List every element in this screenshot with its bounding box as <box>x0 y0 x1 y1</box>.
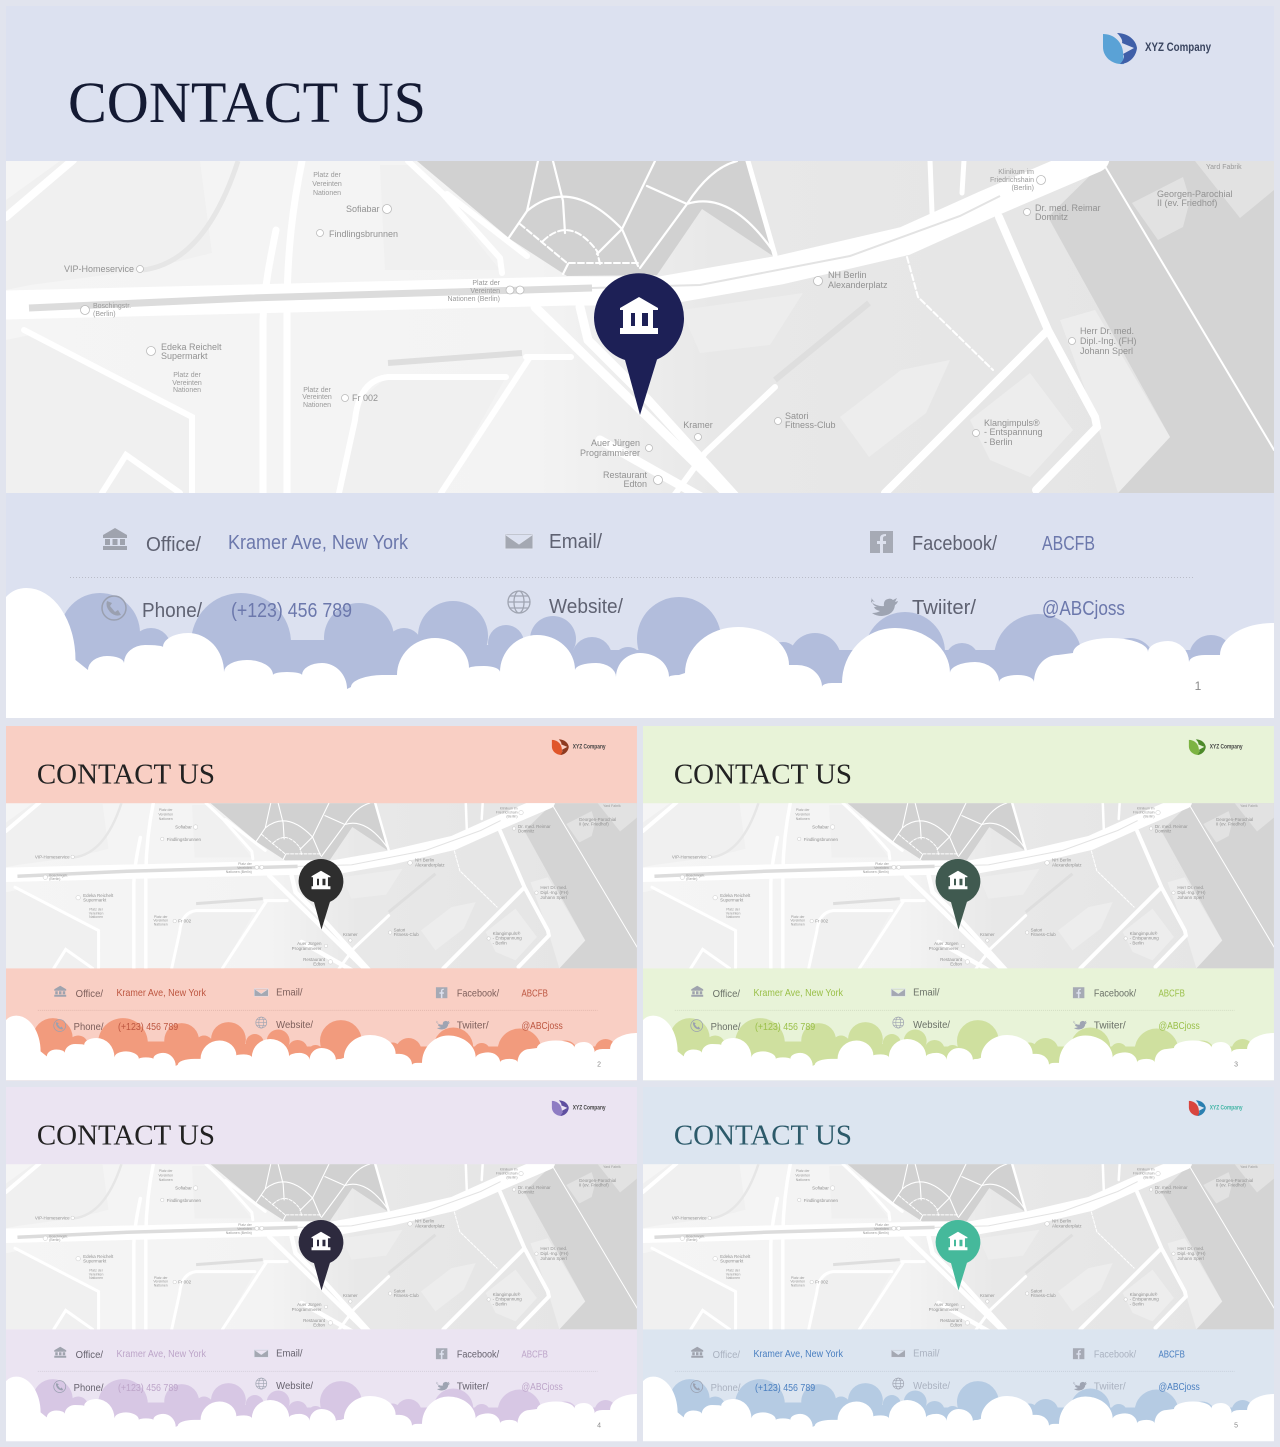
map pin <box>299 859 343 930</box>
logo <box>552 739 606 755</box>
page number: 5 <box>1234 1422 1238 1429</box>
contact details: (+123) 456 789 <box>118 1022 179 1033</box>
contact details: (+123) 456 789 <box>118 1383 179 1394</box>
title: CONTACT US <box>68 70 426 135</box>
contact details: @ABCjoss <box>522 1382 563 1393</box>
slide 1 background <box>6 6 1274 718</box>
contact details: Kramer Ave, New York <box>116 988 206 999</box>
logo <box>552 1100 606 1116</box>
contact details <box>38 988 598 1033</box>
title: CONTACT US <box>674 759 852 791</box>
contact details: Facebook/ <box>457 989 499 1000</box>
contact details: ABCFB <box>1042 533 1095 555</box>
contact details: (+123) 456 789 <box>231 600 352 622</box>
clouds <box>643 1377 1274 1441</box>
page number: 1 <box>1195 679 1202 693</box>
logo: XYZ Company <box>573 1105 606 1111</box>
logo <box>1189 1100 1243 1116</box>
map pin <box>594 273 684 415</box>
contact details: Phone/ <box>711 1383 741 1394</box>
clouds <box>643 1016 1274 1080</box>
map <box>6 1163 637 1331</box>
slide 2 background <box>6 726 637 1080</box>
contact details <box>675 1349 1235 1394</box>
logo: XYZ Company <box>1210 1105 1243 1111</box>
map <box>6 802 637 970</box>
map pin <box>299 1220 343 1291</box>
contact details: ABCFB <box>522 989 548 1000</box>
contact details: Kramer Ave, New York <box>753 988 843 999</box>
contact details: @ABCjoss <box>1159 1021 1200 1032</box>
logo: XYZ Company <box>1145 40 1211 54</box>
contact details: ABCFB <box>522 1350 548 1361</box>
slide 4 background <box>6 1087 637 1441</box>
slide 4: lavender <box>6 1087 637 1441</box>
title: CONTACT US <box>674 1120 852 1152</box>
title: CONTACT US <box>37 1120 215 1152</box>
contact details: Office/ <box>76 1350 103 1361</box>
slide 2: peach <box>6 726 637 1080</box>
contact details: Kramer Ave, New York <box>116 1349 206 1360</box>
contact details: Website/ <box>276 1381 313 1392</box>
contact icons <box>102 528 898 620</box>
clouds <box>6 1377 637 1441</box>
contact details: Facebook/ <box>1094 989 1136 1000</box>
contact details: Website/ <box>913 1381 950 1392</box>
map pin <box>936 859 980 930</box>
contact details: Email/ <box>913 1349 940 1360</box>
contact details: Email/ <box>549 531 602 553</box>
contact details: (+123) 456 789 <box>755 1383 816 1394</box>
slide 1: navy contact us <box>6 6 1274 718</box>
contact details: ABCFB <box>1159 1350 1185 1361</box>
contact details: Facebook/ <box>457 1350 499 1361</box>
contact details: Twiiter/ <box>1094 1382 1126 1393</box>
contact details: Website/ <box>276 1020 313 1031</box>
clouds <box>6 588 1274 718</box>
contact details: Phone/ <box>711 1022 741 1033</box>
contact icons <box>54 1347 450 1393</box>
logo <box>1103 33 1211 64</box>
logo <box>1189 739 1243 755</box>
contact icons <box>54 986 450 1032</box>
contact details: Twiiter/ <box>457 1382 489 1393</box>
contact details: Email/ <box>913 988 940 999</box>
contact icons <box>691 986 1087 1032</box>
page number: 2 <box>597 1061 601 1068</box>
contact details: Kramer Ave, New York <box>753 1349 843 1360</box>
slide 5: light blue <box>643 1087 1274 1441</box>
contact details: Email/ <box>276 1349 303 1360</box>
map <box>643 1163 1274 1331</box>
contact details: Phone/ <box>74 1383 104 1394</box>
contact details: Twiiter/ <box>1094 1021 1126 1032</box>
contact details: Website/ <box>913 1020 950 1031</box>
contact details: Facebook/ <box>912 533 997 555</box>
contact details: @ABCjoss <box>1159 1382 1200 1393</box>
contact details: Office/ <box>146 534 201 556</box>
contact details: Facebook/ <box>1094 1350 1136 1361</box>
map <box>643 802 1274 970</box>
slide 3: green <box>643 726 1274 1080</box>
contact details: Phone/ <box>142 600 202 622</box>
contact details: ABCFB <box>1159 989 1185 1000</box>
page number: 4 <box>597 1422 601 1429</box>
contact details: Website/ <box>549 596 623 618</box>
contact details <box>70 531 1195 622</box>
map <box>6 158 1274 497</box>
contact details: Office/ <box>713 1350 740 1361</box>
slide 3 background <box>643 726 1274 1080</box>
contact details: Kramer Ave, New York <box>228 532 409 554</box>
contact details <box>38 1349 598 1394</box>
logo: XYZ Company <box>573 744 606 750</box>
contact details: @ABCjoss <box>522 1021 563 1032</box>
contact details: Twiiter/ <box>457 1021 489 1032</box>
map pin <box>936 1220 980 1291</box>
contact icons <box>691 1347 1087 1393</box>
contact details: Twiiter/ <box>912 597 976 619</box>
contact details: Office/ <box>76 989 103 1000</box>
contact details: Email/ <box>276 988 303 999</box>
contact details: (+123) 456 789 <box>755 1022 816 1033</box>
contact details: Phone/ <box>74 1022 104 1033</box>
clouds <box>6 1016 637 1080</box>
contact details <box>675 988 1235 1033</box>
page number: 3 <box>1234 1061 1238 1068</box>
contact details: Office/ <box>713 989 740 1000</box>
logo: XYZ Company <box>1210 744 1243 750</box>
slide 5 background <box>643 1087 1274 1441</box>
title: CONTACT US <box>37 759 215 791</box>
contact details: @ABCjoss <box>1042 598 1125 620</box>
